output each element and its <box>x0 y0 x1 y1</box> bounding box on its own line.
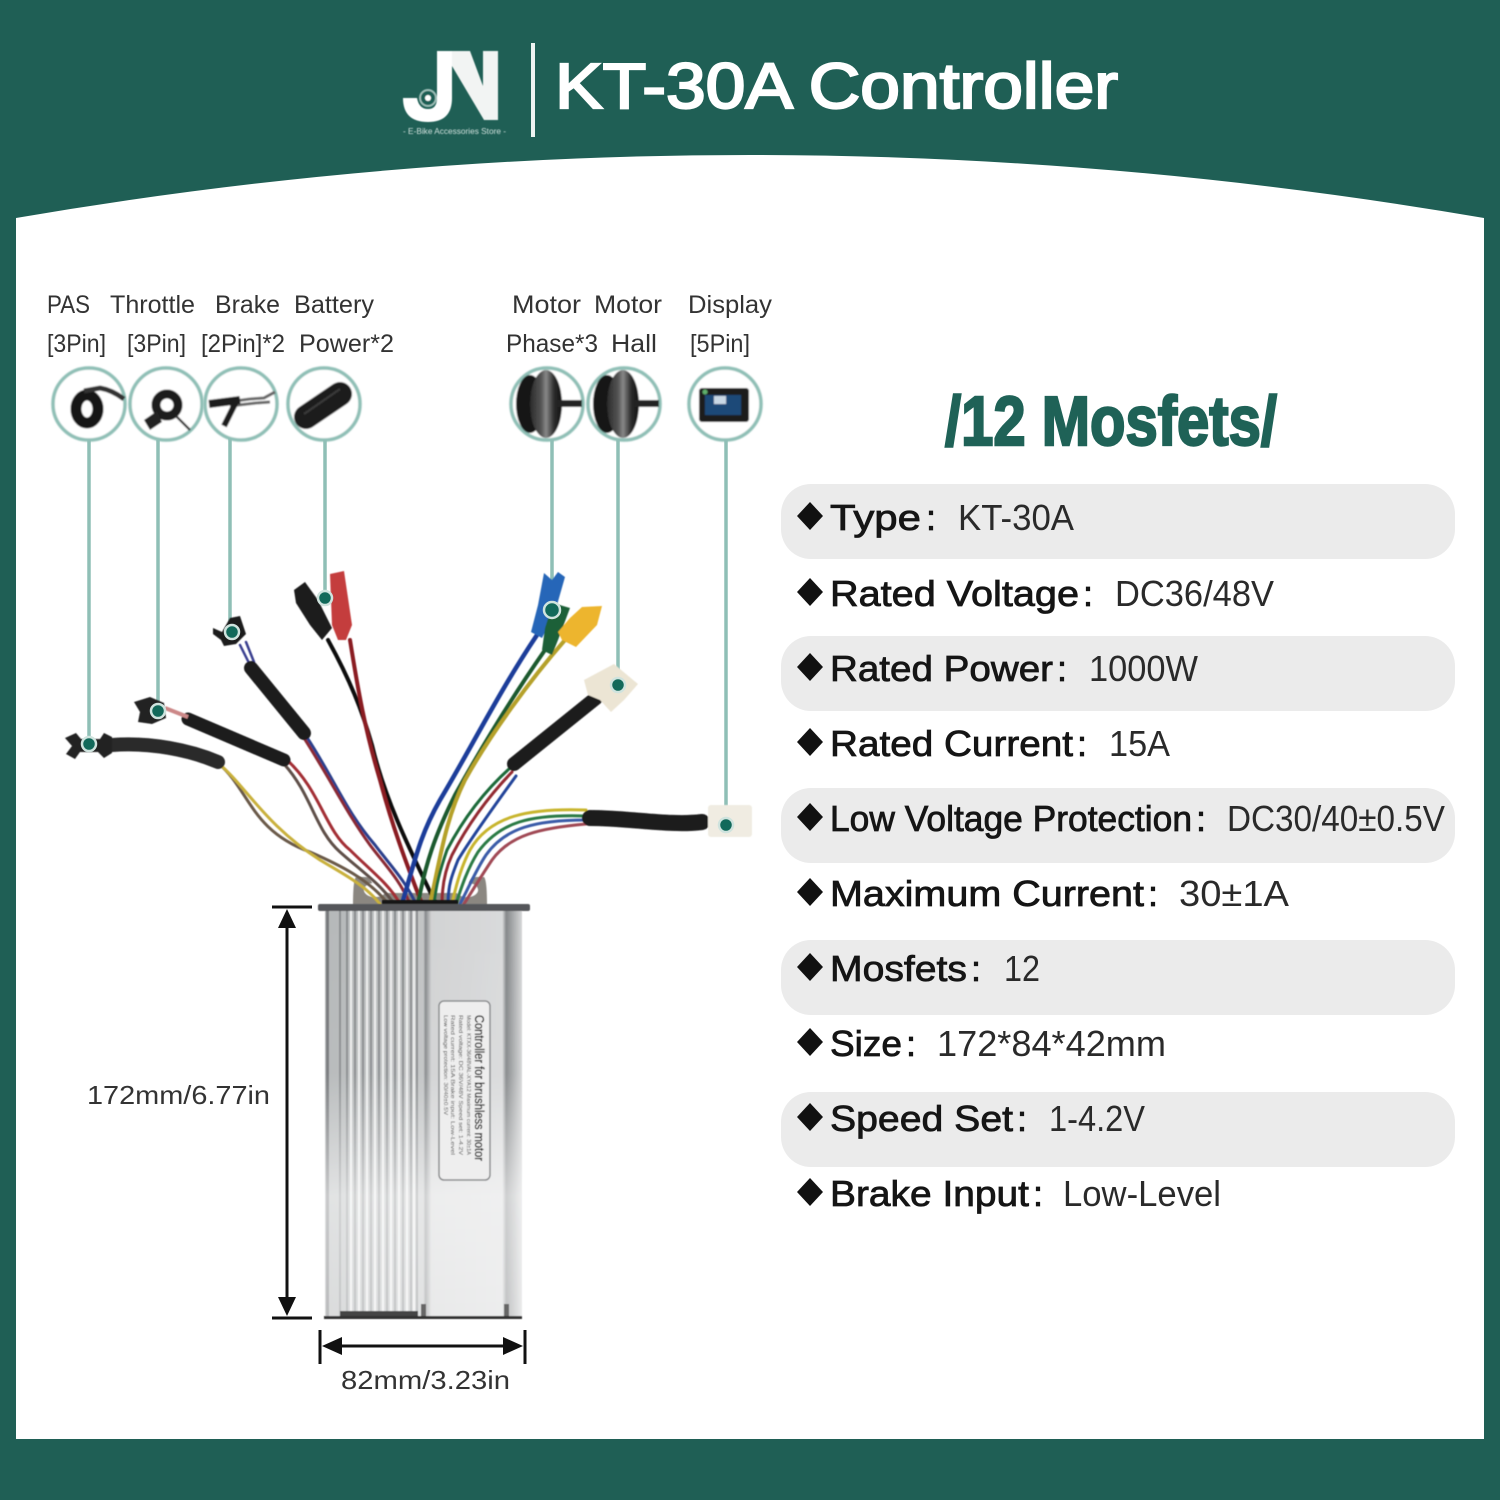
icon: display <box>689 368 761 440</box>
connector labels: left group: Power*2 <box>299 330 394 358</box>
Green phase connector <box>542 603 570 655</box>
spec: rated power: Rated Power <box>830 648 1053 689</box>
icon: motor hub, hall <box>588 368 660 440</box>
top flange <box>318 904 530 911</box>
Hall sleeve <box>514 698 596 764</box>
connector labels: right group: Motor <box>512 291 581 319</box>
spec: size: Size <box>830 1023 902 1064</box>
spec: low voltage protection: Low Voltage Protection <box>830 798 1192 839</box>
spec: low voltage protection: : <box>1196 798 1206 839</box>
leader lines <box>89 438 726 825</box>
spec: maximum current: Maximum Current <box>830 873 1144 914</box>
spec: speed set: : <box>1017 1098 1027 1139</box>
spec: maximum current: 30±1A <box>1179 873 1289 914</box>
product label: Controller for brushless motor <box>472 1015 486 1161</box>
spec: brake input <box>797 1173 1221 1214</box>
icon: throttle <box>130 368 202 440</box>
connector labels: left group: [3Pin] <box>47 330 106 358</box>
spec: rated current: Rated Current <box>830 723 1073 764</box>
connector labels: right group: Motor <box>594 291 662 319</box>
Battery black connector <box>294 582 332 640</box>
cooling fins <box>340 911 417 1316</box>
spec: size: 172*84*42mm <box>937 1023 1166 1064</box>
height dimension arrow <box>272 907 312 1318</box>
connector labels: left group: PAS <box>47 291 90 319</box>
spec: rated voltage: : <box>1083 573 1093 614</box>
Brake sleeve <box>251 668 304 733</box>
height dimension label: 172mm/6.77in <box>87 1080 270 1110</box>
Motor phase wires <box>402 635 537 904</box>
Hall wires <box>434 768 516 904</box>
spec row pills <box>781 484 1455 1167</box>
Brake connector <box>213 616 246 646</box>
spec: speed set <box>797 1098 1145 1139</box>
Throttle wires <box>284 760 400 904</box>
PAS connector <box>65 733 112 759</box>
product label: Rated voltage: DC 36V/48V Speed set: 1-4.2V <box>457 1015 463 1155</box>
PAS wires <box>218 763 388 904</box>
width dimension label: 82mm/3.23in <box>341 1365 510 1395</box>
product label: Model: KTXX-36/48VAL-XYA12 Maximum current: 30±1A <box>465 1015 471 1155</box>
title: KT-30A Controller <box>555 50 1118 122</box>
spec: rated voltage <box>797 573 1274 614</box>
spec: rated current: 15A <box>1109 723 1170 764</box>
header divider <box>531 43 535 137</box>
spec: rated power: 1000W <box>1089 648 1198 689</box>
Yellow phase connector <box>558 606 602 647</box>
connector labels: right group: Display <box>688 291 772 319</box>
connector labels: right group: [5Pin] <box>690 330 750 358</box>
connector labels: left group: Throttle <box>110 291 195 319</box>
connector marker dots <box>82 591 733 832</box>
spec: rated voltage: DC36/48V <box>1115 573 1274 614</box>
icon: motor hub, phase <box>511 368 583 440</box>
spec: type <box>797 497 1074 538</box>
icon: PAS sensor <box>53 368 125 440</box>
connector labels: left group: [2Pin]*2 <box>201 330 285 358</box>
wiring harness <box>65 571 752 904</box>
icon: battery <box>288 368 360 440</box>
connector labels: left group: Battery <box>294 291 375 319</box>
Display connector <box>708 805 752 837</box>
lower highlight <box>325 911 522 1318</box>
Throttle sleeve <box>188 719 284 760</box>
icon: brake lever <box>205 368 277 440</box>
spec: size: : <box>906 1023 916 1064</box>
spec: rated current <box>797 723 1170 764</box>
connector labels: left group: [3Pin] <box>127 330 186 358</box>
connector labels: left group: Brake <box>215 291 280 319</box>
spec: mosfets <box>797 948 1040 989</box>
Display sleeve <box>590 818 702 823</box>
spec: low voltage protection <box>797 798 1445 839</box>
spec: type: Type <box>830 497 921 538</box>
product label <box>439 1001 490 1180</box>
connector labels: right group: Hall <box>611 330 657 358</box>
case body <box>325 911 522 1318</box>
spec: type: : <box>926 497 936 538</box>
connector labels: right group: Phase*3 <box>506 330 598 358</box>
Brake wires <box>240 642 416 904</box>
spec: mosfets: 12 <box>1004 948 1040 989</box>
spec: rated power: : <box>1057 648 1067 689</box>
spec: speed set: 1-4.2V <box>1049 1098 1145 1139</box>
controller unit <box>318 900 530 1319</box>
PAS sleeve <box>112 744 218 762</box>
width dimension arrow <box>320 1330 525 1364</box>
spec: mosfets: Mosfets <box>830 948 967 989</box>
bottom edge <box>324 1316 522 1319</box>
logo: JN store mark <box>403 51 506 136</box>
spec: speed set: Speed Set <box>830 1098 1013 1139</box>
logo: JN store mark: - E-Bike Accessories Store - <box>403 127 506 136</box>
mounting bracket <box>353 877 487 905</box>
spec: low voltage protection: DC30/40±0.5V <box>1227 798 1445 839</box>
spec: type: KT-30A <box>958 497 1074 538</box>
product label: Rated current: 15A Brake input: Low-Level <box>449 1015 455 1155</box>
Throttle connector <box>134 697 166 724</box>
spec: maximum current: : <box>1148 873 1158 914</box>
connector labels: left group <box>47 291 394 358</box>
product label: Low voltage protection: 30/40±0.5V <box>442 1015 448 1115</box>
spec: brake input: : <box>1033 1173 1043 1214</box>
spec: maximum current <box>797 873 1289 914</box>
Hall connector <box>584 664 638 712</box>
Display wires <box>452 810 586 904</box>
spec: mosfets: : <box>971 948 981 989</box>
Battery red connector <box>330 571 352 640</box>
spec: brake input: Brake Input <box>830 1173 1029 1214</box>
spec heading: /12 Mosfets/ <box>945 382 1277 460</box>
Battery wires <box>328 640 436 904</box>
spec: size <box>797 1023 1166 1064</box>
Blue phase connector <box>531 572 565 638</box>
spec: rated voltage: Rated Voltage <box>830 573 1079 614</box>
spec: rated power <box>797 648 1198 689</box>
spec: brake input: Low-Level <box>1063 1173 1221 1214</box>
connector labels: right group <box>506 291 772 358</box>
spec: rated current: : <box>1077 723 1087 764</box>
